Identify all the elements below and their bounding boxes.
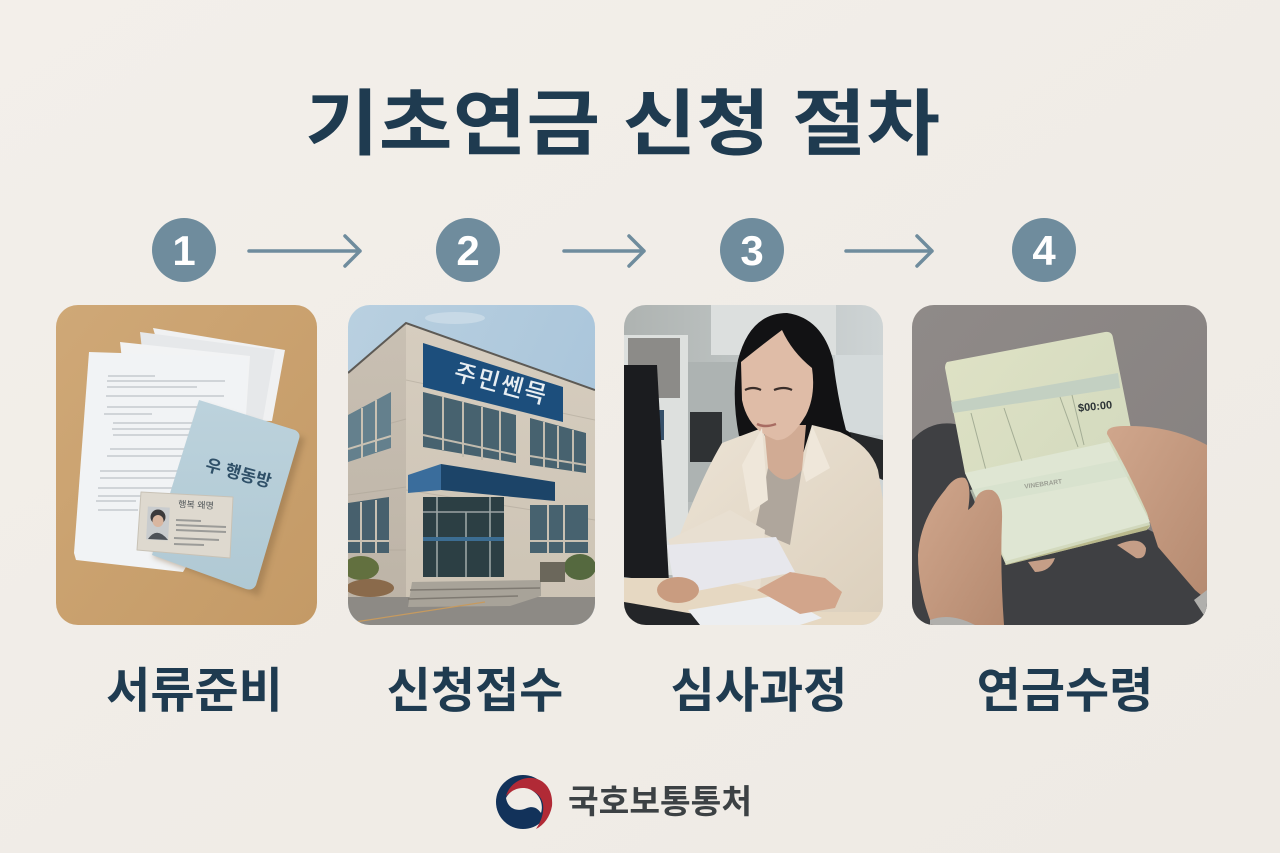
- awning: [408, 464, 441, 493]
- step number 4: [1012, 218, 1076, 282]
- illustration: ground and steps: [348, 580, 595, 625]
- panel: reviewer at desk photo: [624, 305, 883, 625]
- illustration: paper in hands: [657, 537, 842, 625]
- illustration: ID card: [137, 492, 233, 558]
- panel: documents photo: [56, 305, 317, 625]
- arrow 1 to 2: [249, 236, 360, 266]
- passbook small print: VINEBRART: [1024, 478, 1062, 491]
- passbook amount: $00:00: [1077, 399, 1113, 415]
- illustration: office background: [624, 305, 883, 575]
- illustration: desk: [624, 578, 883, 625]
- step number 3: [720, 218, 784, 282]
- sign: [423, 343, 563, 422]
- illustration: building: [348, 323, 595, 600]
- step label 4: 연금수령: [977, 665, 1153, 718]
- step number 1: 1: [172, 227, 196, 274]
- step number 1: [152, 218, 216, 282]
- illustration: shrubs: [343, 554, 596, 597]
- step number 2: 2: [456, 227, 480, 274]
- illustration: passbook: [945, 332, 1150, 565]
- sign: 주민쎈믁: [451, 359, 551, 410]
- lower windows: [530, 505, 588, 553]
- icon: taegeuk emblem: [496, 775, 552, 829]
- illustration: finger tips: [1028, 541, 1146, 572]
- panel: passbook in hands photo: [912, 305, 1207, 625]
- folder text: 우 행동방: [203, 456, 274, 492]
- illustration: paper stack: [74, 328, 285, 572]
- arrow 2 to 3: [564, 236, 644, 266]
- upper windows: [423, 392, 516, 463]
- step indicator row: [152, 218, 1076, 282]
- step label 3: 심사과정: [671, 665, 847, 718]
- title: 기초연금 신청 절차: [305, 85, 940, 165]
- entrance: [423, 497, 504, 577]
- arrow 3 to 4: [846, 236, 932, 266]
- illustration: monitor: [624, 365, 669, 583]
- agency name: 국호보통통처: [568, 783, 752, 820]
- illustration: sleeve: [930, 590, 1207, 625]
- step label 2: 신청접수: [387, 665, 563, 718]
- illustration: right hand: [1107, 426, 1207, 600]
- panel: community center building photo: [343, 305, 596, 625]
- footer logo and agency name: [496, 775, 752, 829]
- illustration: left hand: [918, 478, 1004, 625]
- step number 3: 3: [740, 227, 764, 274]
- step number 2: [436, 218, 500, 282]
- illustration: dark trousers: [912, 423, 1207, 625]
- illustration: ID card: 행복 왜명: [178, 498, 214, 511]
- illustration: blue folder: [152, 400, 305, 596]
- illustration: woman: [668, 313, 883, 612]
- step number 4: 4: [1032, 227, 1056, 274]
- step label 1: 서류준비: [106, 665, 283, 718]
